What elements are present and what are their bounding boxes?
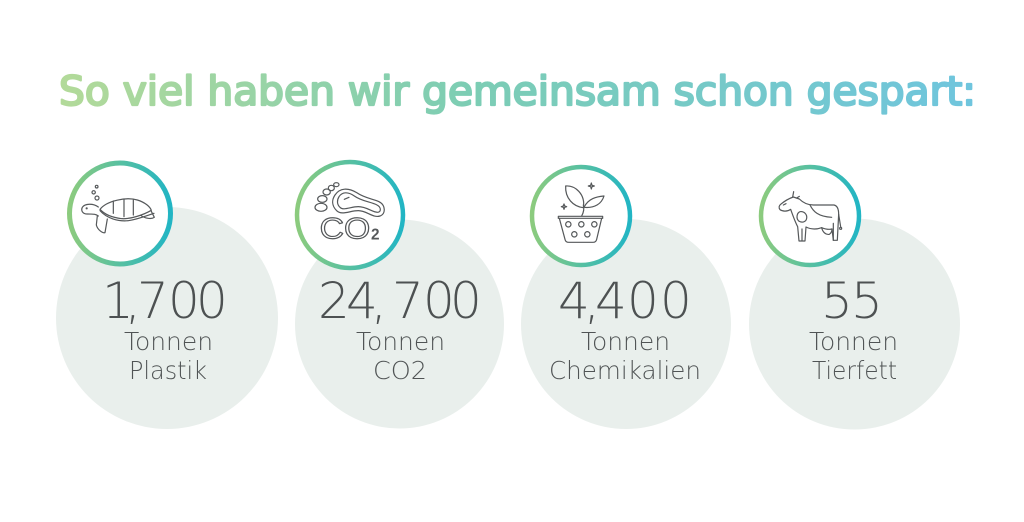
panel: CO2 xyxy=(295,162,504,428)
icon: turtle xyxy=(70,163,170,264)
background circle: chemicals xyxy=(521,219,731,429)
label: Plastik: Plastik xyxy=(129,356,207,385)
value: 24,700: 24,700 xyxy=(318,272,482,330)
label: Tonnen: Tonnen xyxy=(124,327,213,356)
value: 55: 55 xyxy=(821,272,883,330)
panel: animal fat xyxy=(749,167,960,430)
label: Tonnen: Tonnen xyxy=(581,327,670,356)
value: 4,400: 4,400 xyxy=(558,272,692,330)
label: Tonnen: Tonnen xyxy=(356,327,445,356)
background circle: CO2 xyxy=(295,220,504,428)
panel: chemicals xyxy=(521,167,731,429)
icon: CO2 footprint: CO xyxy=(320,212,370,245)
title: So viel haben wir gemeinsam schon gespart: xyxy=(59,69,976,115)
background circle: animal fat xyxy=(749,218,960,430)
label: Tonnen: Tonnen xyxy=(809,327,898,356)
icon: cow xyxy=(761,167,859,265)
label: Tierfett: Tierfett xyxy=(812,356,897,385)
background circle: plastic xyxy=(56,207,278,429)
icon: CO2 footprint xyxy=(297,162,403,268)
value: 1,700: 1,700 xyxy=(102,272,228,330)
label: Chemikalien: Chemikalien xyxy=(549,356,701,385)
icon: CO2 footprint: 2 xyxy=(371,226,380,243)
label: CO2: CO2 xyxy=(373,356,427,385)
icon: plant in pot xyxy=(532,167,630,265)
panel: plastic xyxy=(56,163,278,429)
